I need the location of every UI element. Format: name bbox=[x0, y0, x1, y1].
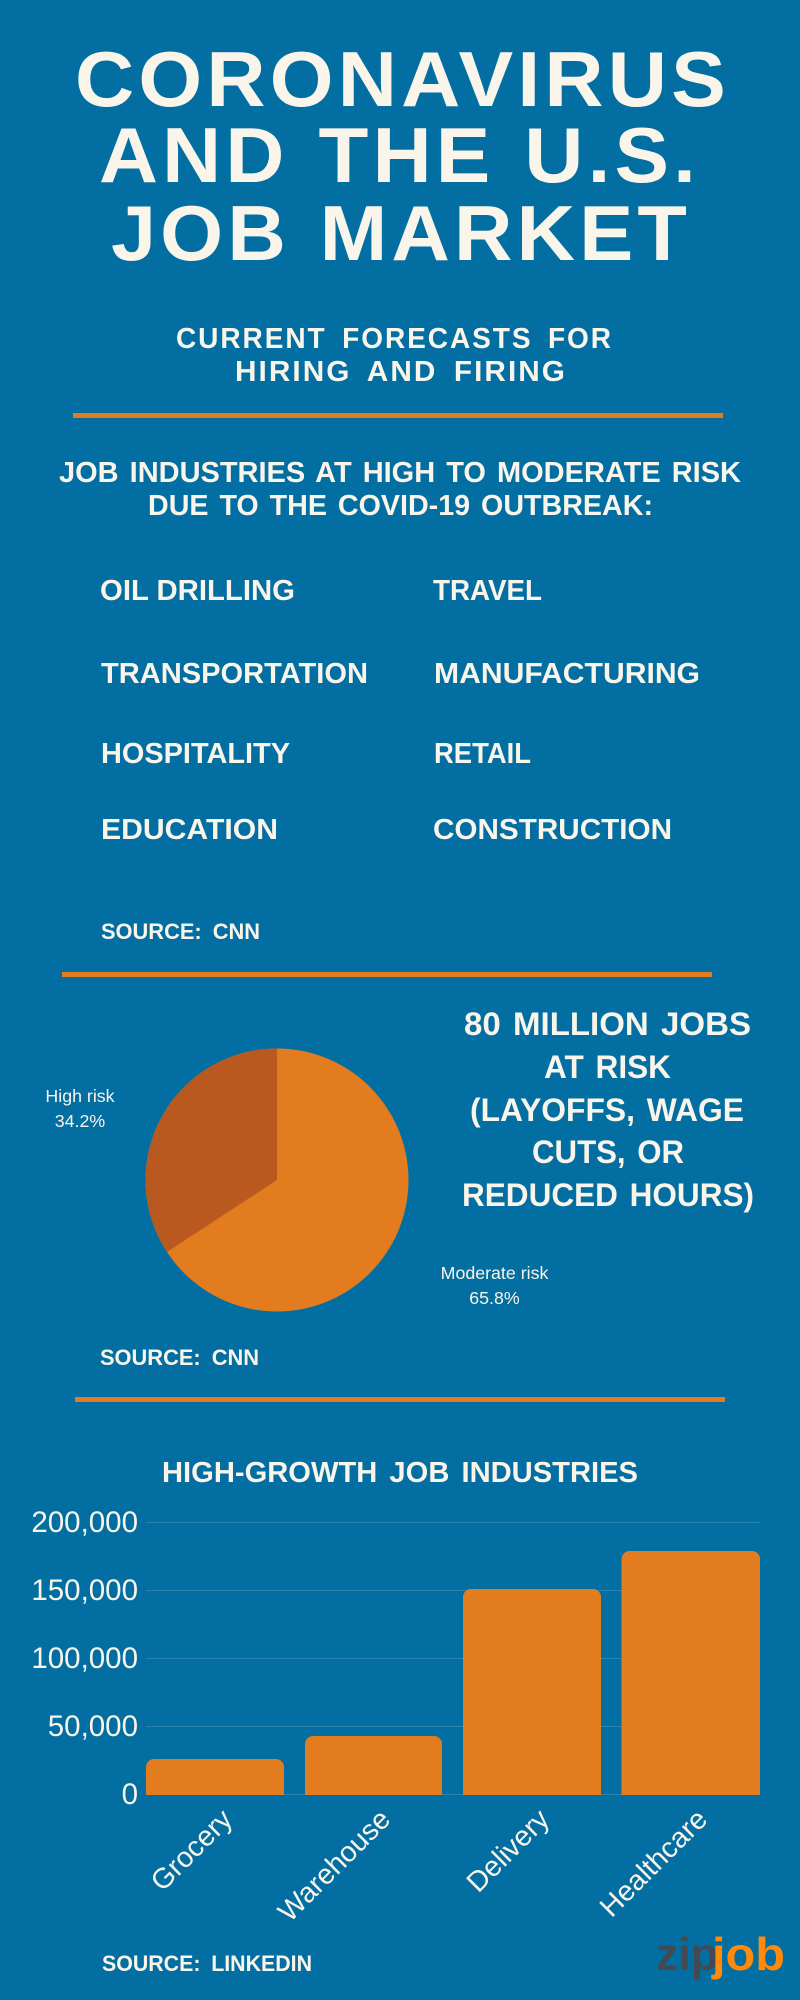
pie slice: high risk bbox=[146, 1048, 277, 1252]
heading: industries at risk: JOB INDUSTRIES AT HIGH TO MODERATE RISK bbox=[59, 457, 741, 489]
list: at-risk industries: TRANSPORTATION bbox=[101, 658, 368, 690]
list: at-risk industries bbox=[100, 575, 700, 846]
list: at-risk industries: TRAVEL bbox=[433, 575, 542, 607]
x axis labels: Delivery bbox=[461, 1803, 556, 1899]
list: at-risk industries: EDUCATION bbox=[101, 814, 278, 846]
callout: 80 million jobs at risk: 80 MILLION JOBS bbox=[464, 1006, 751, 1042]
pie label: high risk bbox=[45, 1086, 115, 1131]
x axis labels bbox=[145, 1803, 714, 1928]
heading: high-growth job industries: HIGH-GROWTH JOB INDUSTRIES bbox=[162, 1457, 638, 1489]
list: at-risk industries: RETAIL bbox=[434, 738, 531, 770]
y axis labels: 200,000 bbox=[31, 1506, 138, 1539]
callout: 80 million jobs at risk: (LAYOFFS, WAGE bbox=[470, 1092, 744, 1128]
logo: zipjob: zip bbox=[656, 1928, 718, 1980]
logo: zipjob: job bbox=[711, 1928, 785, 1980]
bar chart: high-growth industries bbox=[31, 1506, 760, 1928]
y axis labels: 100,000 bbox=[31, 1642, 138, 1675]
pie label: moderate risk bbox=[441, 1263, 548, 1308]
x axis labels: Healthcare bbox=[594, 1803, 714, 1923]
list: at-risk industries: CONSTRUCTION bbox=[433, 814, 672, 846]
y axis labels: 150,000 bbox=[31, 1574, 138, 1607]
title: CORONAVIRUS bbox=[75, 35, 730, 123]
pie label: moderate risk: Moderate risk bbox=[441, 1263, 548, 1283]
title: AND THE U.S. bbox=[99, 111, 700, 199]
logo: zipjob bbox=[656, 1928, 785, 1980]
list: at-risk industries: MANUFACTURING bbox=[434, 658, 700, 690]
callout: 80 million jobs at risk bbox=[462, 1006, 754, 1213]
subtitle bbox=[176, 323, 613, 388]
pie chart: risk share bbox=[45, 1048, 548, 1312]
x axis labels: Grocery bbox=[145, 1803, 239, 1898]
x axis labels: Warehouse bbox=[272, 1803, 397, 1928]
subtitle: HIRING AND FIRING bbox=[235, 356, 567, 388]
title bbox=[75, 35, 730, 277]
source: CNN: SOURCE: CNN bbox=[100, 1345, 259, 1370]
pie label: high risk: High risk bbox=[45, 1086, 115, 1106]
source: LinkedIn: SOURCE: LINKEDIN bbox=[102, 1951, 312, 1976]
list: at-risk industries: HOSPITALITY bbox=[101, 738, 290, 770]
subtitle: CURRENT FORECASTS FOR bbox=[176, 323, 613, 355]
heading: industries at risk bbox=[59, 457, 741, 522]
y axis labels: 0 bbox=[122, 1778, 138, 1811]
heading: industries at risk: DUE TO THE COVID-19 OUTBREAK: bbox=[148, 490, 653, 522]
bars bbox=[146, 1551, 760, 1795]
pie label: moderate risk: 65.8% bbox=[469, 1288, 520, 1308]
callout: 80 million jobs at risk: AT RISK bbox=[544, 1049, 671, 1085]
title: JOB MARKET bbox=[111, 189, 691, 277]
list: at-risk industries: OIL DRILLING bbox=[100, 575, 295, 607]
y axis labels: 50,000 bbox=[48, 1710, 138, 1743]
pie label: high risk: 34.2% bbox=[55, 1111, 105, 1131]
callout: 80 million jobs at risk: CUTS, OR bbox=[532, 1134, 684, 1170]
callout: 80 million jobs at risk: REDUCED HOURS) bbox=[462, 1177, 754, 1213]
y axis labels bbox=[31, 1506, 138, 1811]
source: CNN: SOURCE: CNN bbox=[101, 919, 260, 944]
